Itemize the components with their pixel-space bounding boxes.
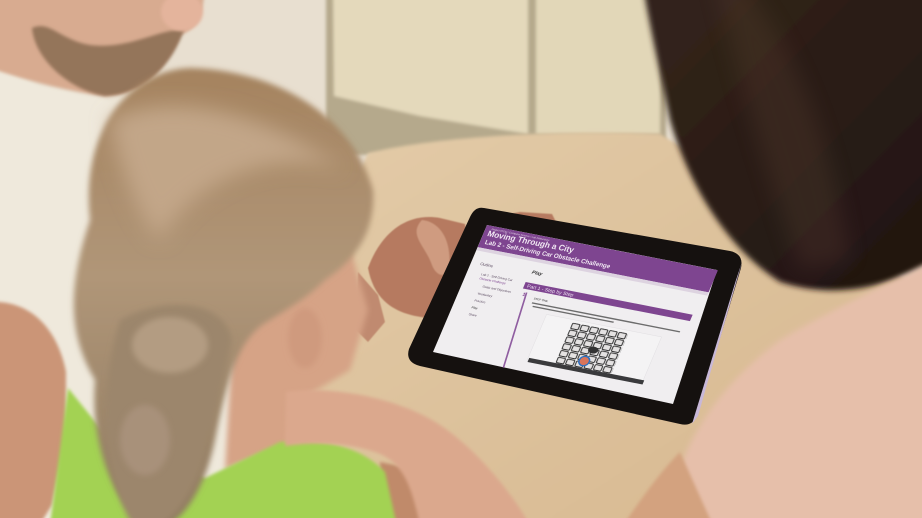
girl's braid (106, 305, 232, 518)
man: shirt and arm (0, 0, 300, 518)
girl's neck and face (225, 230, 368, 470)
girl's hair (74, 68, 373, 518)
lesson title: Moving Through a City (486, 229, 576, 255)
man's other arm under girl's hand (380, 462, 500, 518)
screen content: Part 1 - Step by Step (526, 284, 575, 298)
purple section bar (523, 282, 693, 321)
sidebar outline (468, 262, 513, 316)
tablet screen (433, 225, 717, 404)
man's hand holding tablet (356, 212, 556, 342)
woman's dark hair (642, 0, 922, 290)
tablet (408, 208, 742, 425)
lab title: Lab 2 - Self-Driving Car Obstacle Challenge (484, 239, 612, 270)
man's face and beard (0, 0, 205, 96)
sidebar outline: Play (471, 305, 479, 310)
girl's ear (288, 308, 322, 368)
play button (588, 346, 598, 354)
woman (620, 0, 922, 518)
tablet body (408, 208, 742, 425)
screen content (468, 225, 718, 384)
sidebar outline: Lab 2 - Self-Driving Car (481, 272, 513, 282)
woman's arm (620, 452, 715, 518)
sidebar outline: Obstacle Challenge (479, 277, 507, 285)
man's arm (0, 302, 66, 518)
woman's pink shirt (680, 255, 922, 518)
sidebar outline: Vocabulary (477, 292, 494, 298)
sidebar outline: Goals and Objectives (482, 285, 512, 294)
section heading: Play (531, 270, 543, 277)
wooden round table (300, 133, 922, 518)
video controls (527, 358, 644, 385)
car marker (578, 356, 590, 366)
sidebar outline: Practice (474, 298, 486, 304)
purple header banner (478, 225, 718, 292)
vertical purple timeline (502, 292, 528, 368)
city grid map (555, 322, 628, 374)
man's white shirt (0, 60, 300, 518)
sidebar outline: Share (468, 312, 478, 318)
girl's green shirt (48, 388, 400, 518)
girl's arm and hand (285, 390, 530, 518)
video panel (527, 314, 662, 383)
instruction text: STEP ONE (533, 297, 549, 303)
sidebar outline: Outline (479, 261, 495, 268)
screen content: 1 (521, 292, 527, 298)
girl (48, 68, 530, 518)
breadcrumb: Project STEM / Computer Science / Lab Instructions (491, 228, 551, 242)
background: kitchen cabinets (326, 0, 666, 155)
